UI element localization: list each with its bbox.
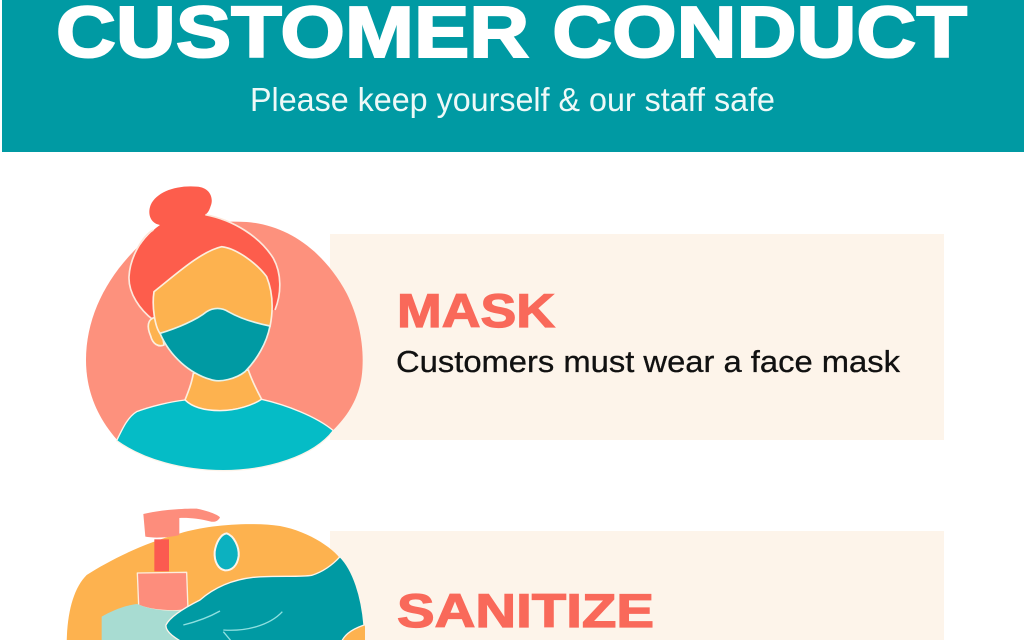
droplet [215,533,239,570]
icon background blob [86,222,363,463]
icon background blob [67,524,365,640]
face [153,247,272,333]
shirt [117,399,333,471]
hair [129,186,280,320]
subtitle: Please keep yourself & our staff safe [250,81,775,118]
panel: sanitize [330,531,944,640]
heading: mask: MASK [397,284,555,337]
bottle [102,604,207,640]
bottle collar [137,572,188,611]
pump stem [154,539,169,571]
neck [185,370,262,411]
panel: mask [330,234,944,440]
header banner [2,0,1024,152]
face mask [160,308,270,381]
pump nozzle [143,509,220,538]
finger lines [183,611,282,640]
ear [148,317,164,346]
text: mask rule: Customers must wear a face mask [396,344,901,379]
icon: person wearing mask [86,186,363,471]
icon: hand and sanitizer pump [67,509,365,640]
heading: sanitize: SANITIZE [397,584,654,637]
hand [166,557,364,640]
